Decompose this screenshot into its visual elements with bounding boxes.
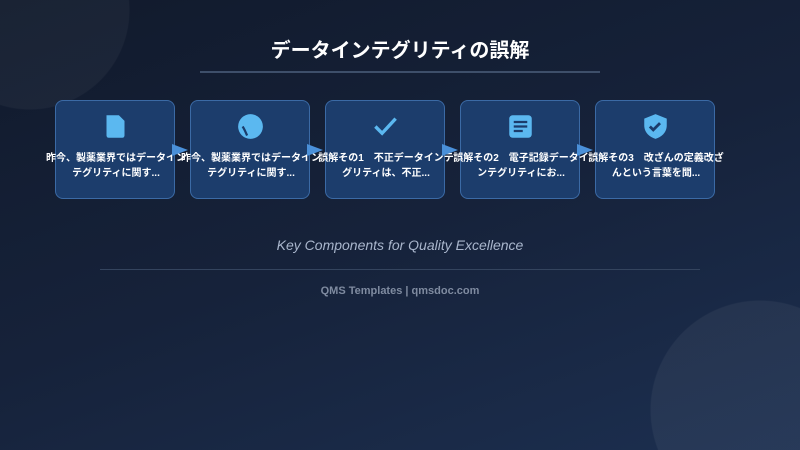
card 3 <box>325 100 445 199</box>
card 1: テグリティに関す... <box>72 168 160 179</box>
card 1 <box>55 100 175 199</box>
icon: check <box>374 118 397 136</box>
subtitle: Key Components for Quality Excellence <box>277 237 523 253</box>
icon: shield <box>644 114 667 139</box>
arrow 1 <box>172 144 188 156</box>
card 5 <box>595 100 715 199</box>
card 2: テグリティに関す... <box>207 168 295 179</box>
icon: document <box>106 115 124 138</box>
arrow 3 <box>442 144 458 156</box>
card 2: 昨今、製薬業界ではデータイン <box>181 153 321 164</box>
card 1: 昨今、製薬業界ではデータイン <box>46 153 186 164</box>
card 3: グリティは、不正... <box>342 168 430 179</box>
card 4 <box>460 100 580 199</box>
card 5: んという言葉を聞... <box>612 168 700 179</box>
card 4: 誤解その2 電子記録データイ <box>453 153 589 164</box>
card 3: 誤解その1 不正データインテ <box>318 153 454 164</box>
card 2 <box>190 100 310 199</box>
icon: globe <box>238 114 263 139</box>
icon: text document <box>509 115 532 138</box>
title: データインテグリティの誤解 <box>271 40 529 62</box>
card 4: ンテグリティにお... <box>477 168 565 179</box>
arrow 2 <box>307 144 323 156</box>
card 5: 誤解その3 改ざんの定義改ざ <box>588 153 724 164</box>
footer: QMS Templates | qmsdoc.com <box>321 285 479 297</box>
arrow 4 <box>577 144 593 156</box>
